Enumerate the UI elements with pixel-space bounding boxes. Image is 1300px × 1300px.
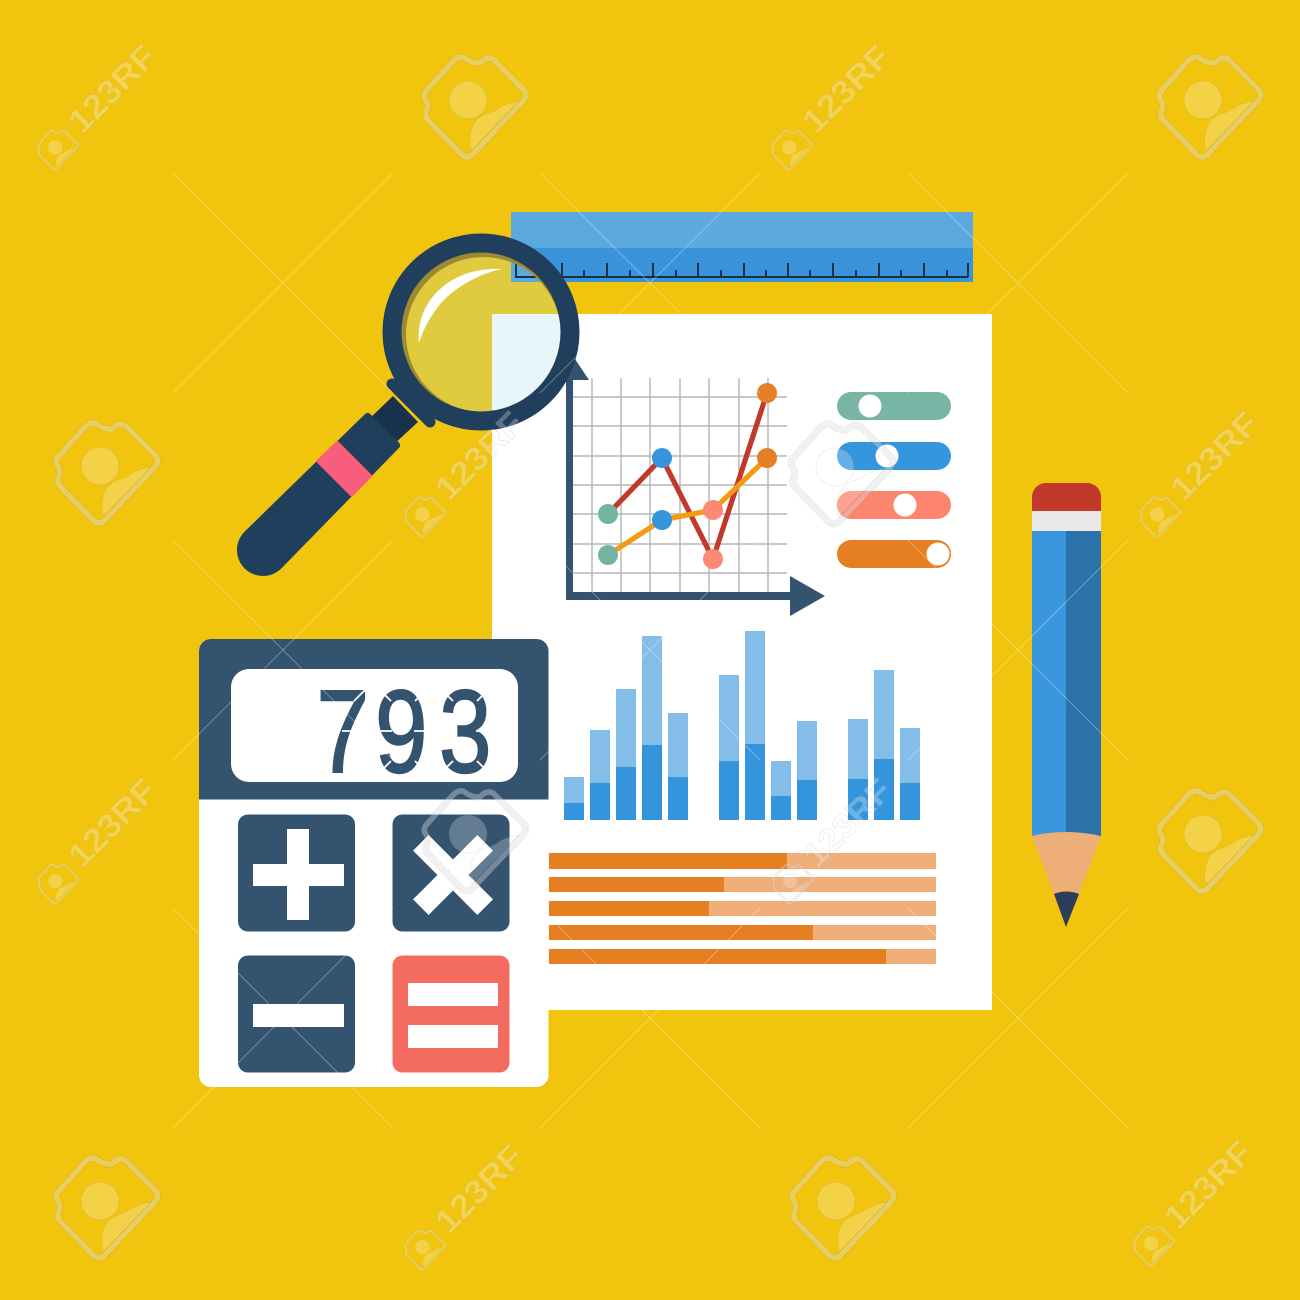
watermark: logo top centre: 123RF [795,37,897,140]
watermark: logo lower left [38,771,163,904]
watermark: logo mid right [1140,404,1265,536]
pencil lead [1054,892,1079,927]
calculator header [199,639,548,800]
watermark: egg row 3 [424,791,1261,891]
toggle: salmon [837,491,951,519]
toggle: green [837,392,951,420]
watermark: logo mid centre [405,404,530,536]
button: equals [392,956,510,1072]
pencil eraser [1032,483,1101,511]
watermark: egg row 1 [424,57,1261,157]
magnifier collar [392,384,430,422]
calculator screen [231,669,518,782]
ruler [511,212,973,282]
watermark: logo top centre [772,37,897,170]
watermark: logo bottom centre [405,1137,530,1270]
handle pink band [316,440,373,497]
magnifier ring [392,243,570,421]
icon: magnifying glass [226,212,591,587]
progress bar 3 [549,901,936,916]
watermark: logo top left: 123RF [61,37,163,140]
chart grid [573,378,787,592]
watermark: logo mid centre: 123RF [428,404,530,507]
button: multiply [389,811,517,939]
toggle legend [837,392,951,568]
watermark: logo mid right: 123RF [1163,404,1265,507]
icon: pencil [1032,483,1101,927]
lens inner shadow [401,252,561,412]
red data line [608,393,767,559]
pencil body shade [1066,531,1101,836]
watermark: logo top left [38,37,163,170]
bars: light segments [564,631,920,820]
lens highlight [419,269,502,343]
progress bar 4 [549,925,936,940]
data points [598,383,777,569]
pencil ferrule [1032,511,1101,531]
progress bar 5 [549,949,936,964]
progress bar 1 [549,853,936,869]
panel: calculator [199,639,548,1087]
watermark: egg row 4 [56,1158,894,1258]
pencil body [1032,531,1066,836]
panel: report paper [492,314,992,1010]
ruler scale ticks [516,263,968,277]
watermark: logo bottom right [1134,1133,1259,1266]
watermark: logo lower centre: 123RF [796,771,898,874]
magnifier lens [406,257,560,412]
calculator body [199,639,548,1087]
calculator display value: 793 [317,667,491,797]
bars: dark segments [564,744,920,820]
button: minus [238,956,355,1072]
toggle: orange [837,540,951,568]
orange data line [608,458,767,555]
line chart [550,356,825,616]
magnifier handle [226,410,403,587]
pencil wood tip [1032,832,1101,894]
stacked bar chart [564,631,920,820]
toggle: blue [837,442,951,470]
watermark: logo lower centre [773,771,898,904]
horizontal progress bars [549,853,936,964]
chart axes with arrows [550,356,825,616]
button: plus [238,814,355,932]
watermark: logo lower left: 123RF [61,771,163,874]
progress bar 2 [549,877,936,892]
magnifier neck [367,396,418,446]
watermark: egg row 2 [56,423,893,524]
watermark: logo bottom centre: 123RF [428,1137,530,1240]
watermark: logo bottom right: 123RF [1157,1133,1259,1236]
